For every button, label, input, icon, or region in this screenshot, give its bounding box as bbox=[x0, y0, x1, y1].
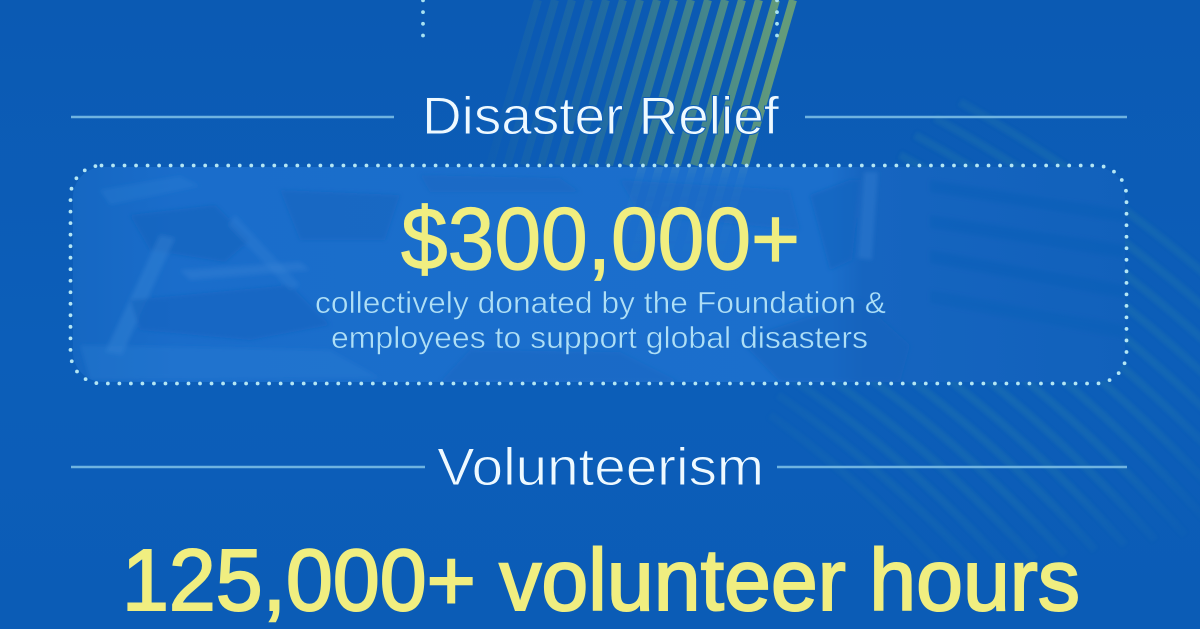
big number: $300,000+: $300,000+ bbox=[401, 189, 800, 288]
top dotted connector right bbox=[775, 0, 779, 37]
heading rule right: Disaster Relief bbox=[805, 116, 1127, 118]
heading rule left: Volunteerism bbox=[71, 466, 425, 468]
heading: Volunteerism: Volunteerism bbox=[437, 438, 764, 497]
decorative slanted green stripes, top centre bbox=[490, 0, 793, 165]
dotted panel border bbox=[70, 166, 1126, 384]
top dotted connector left bbox=[421, 0, 425, 37]
decorative curved stripes, lower right bbox=[836, 114, 1200, 508]
description line 2: employees to support global disasters bbox=[331, 320, 868, 355]
faint stripes continuing through panel bbox=[636, 167, 748, 176]
heading rule left: Disaster Relief bbox=[71, 116, 394, 118]
panel: disaster relief bbox=[70, 165, 1127, 384]
description line 1: collectively donated by the Foundation & bbox=[315, 285, 886, 320]
heading rule right: Volunteerism bbox=[777, 466, 1127, 468]
heading: Disaster Relief: Disaster Relief bbox=[422, 87, 779, 146]
panel photo background bbox=[70, 165, 1127, 384]
big statistic: volunteer hours: 125,000+ volunteer hours bbox=[122, 532, 1080, 629]
